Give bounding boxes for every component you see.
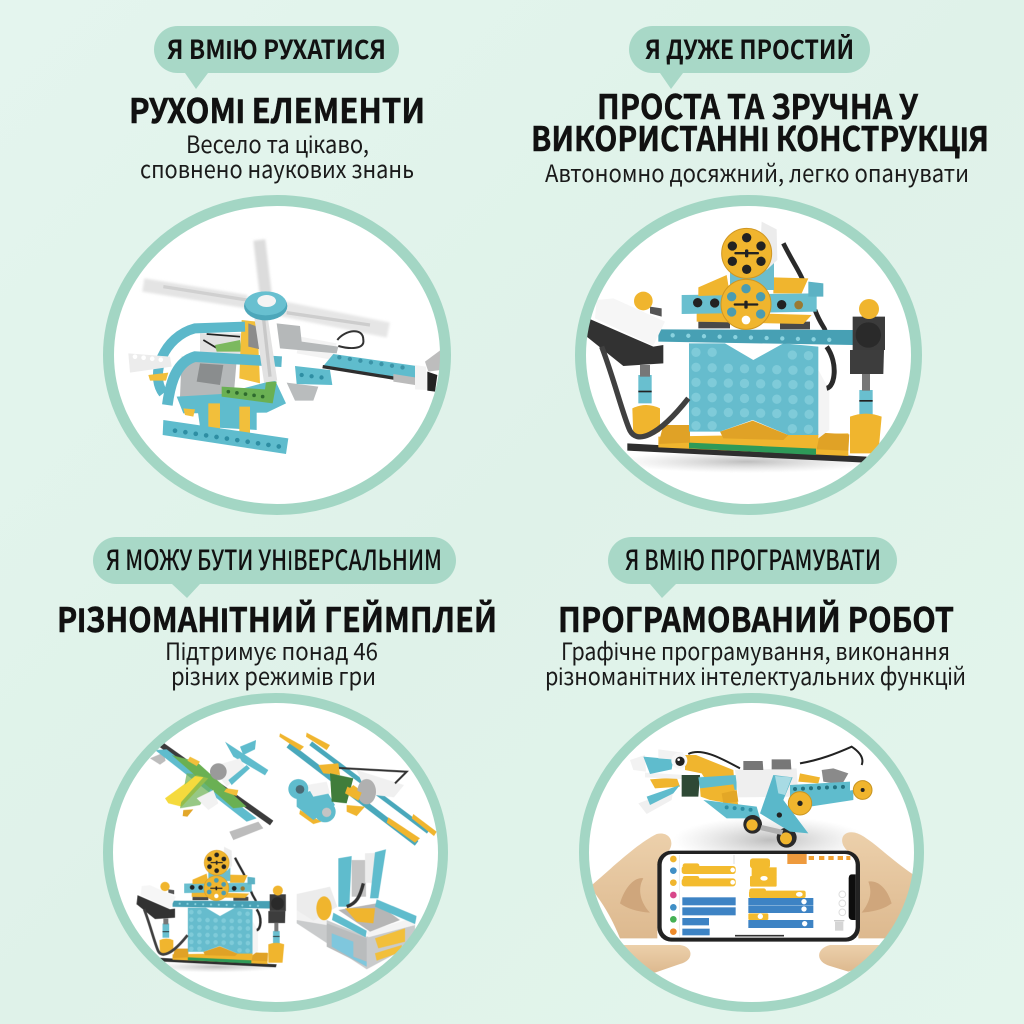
- description: simple construction: Автономно досяжний, легко опанувати: [545, 154, 969, 189]
- speech bubble: I am very simple: Я ДУЖЕ ПРОСТИЙ: [645, 30, 854, 67]
- dinosaur robot: [630, 747, 872, 848]
- circle image: robot and phone: [582, 696, 922, 1010]
- panel: programmable robot: [545, 537, 966, 1010]
- phone with block programming: [657, 851, 860, 942]
- description: moving elements: сповнено наукових знань: [140, 150, 414, 185]
- heading: varied gameplay: РІЗНОМАНІТНИЙ ГЕЙМПЛЕЙ: [57, 593, 497, 642]
- description: programmable robot: Графічне програмування, виконання: [561, 632, 950, 667]
- circle image: machine with gears: [578, 199, 918, 511]
- speech bubble: I can be universal: [93, 537, 456, 598]
- description: varied gameplay: [165, 632, 378, 692]
- circle image: helicopter: [107, 199, 447, 511]
- small plane: [150, 740, 273, 840]
- panel: varied gameplay: [57, 537, 497, 1010]
- description: programmable robot: різноманітних інтелектуальних функцій: [545, 657, 966, 692]
- description: moving elements: [140, 125, 414, 185]
- heading: simple and convenient construction: ПРОСТА ТА ЗРУЧНА У: [597, 80, 919, 129]
- motorised box: [297, 849, 417, 969]
- description: moving elements: Весело та цікаво,: [186, 125, 369, 160]
- biplane: [279, 733, 437, 843]
- circle image: four robot models: [106, 696, 446, 1010]
- speech bubble: I can move: [154, 26, 399, 89]
- heading: programmable robot: ПРОГРАМОВАНИЙ РОБОТ: [558, 593, 954, 642]
- panel: moving elements: [107, 26, 447, 511]
- pulley machine: [137, 847, 286, 972]
- hands: [590, 832, 917, 973]
- speech bubble: I am very simple: [629, 26, 870, 89]
- description: varied gameplay: різних режимів гри: [171, 657, 376, 692]
- speech bubble: I can move: Я ВМІЮ РУХАТИСЯ: [167, 30, 386, 67]
- heading: simple and convenient construction: [531, 80, 989, 161]
- description: programmable robot: [545, 632, 966, 692]
- speech bubble: I can program: Я ВМІЮ ПРОГРАМУВАТИ: [625, 539, 881, 579]
- speech bubble: I can be universal: Я МОЖУ БУТИ УНІВЕРСАЛЬНИМ: [106, 539, 442, 579]
- description: varied gameplay: Підтримує понад 46: [165, 632, 378, 667]
- speech bubble: I can program: [608, 537, 897, 598]
- panel: simple construction: [531, 26, 989, 511]
- heading: moving elements: РУХОМІ ЕЛЕМЕНТИ: [129, 84, 425, 133]
